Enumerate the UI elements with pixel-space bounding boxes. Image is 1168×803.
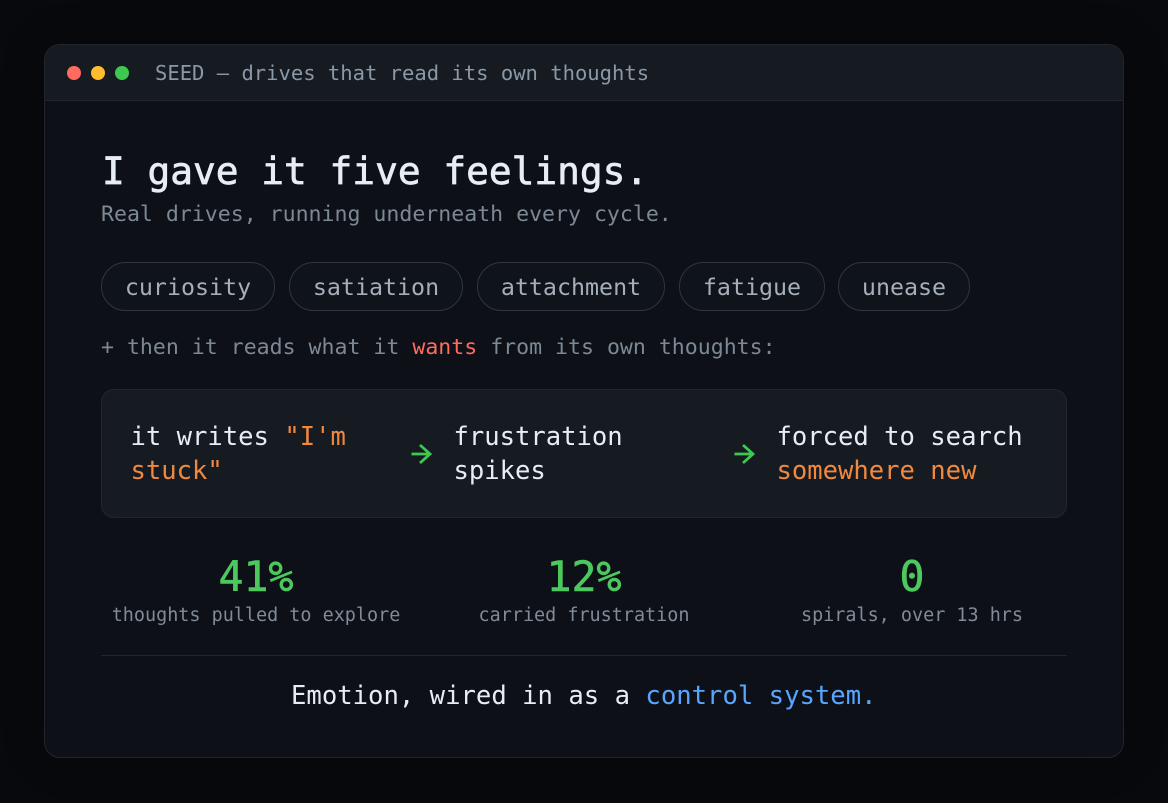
arrow 1 <box>412 444 432 464</box>
flow step 2: spikes <box>454 456 546 486</box>
chip: satiation <box>289 262 463 311</box>
chip: attachment <box>477 262 665 311</box>
chip: satiation: satiation <box>313 274 439 301</box>
chip: fatigue <box>679 262 825 311</box>
arrow 2 <box>734 444 755 464</box>
heading: I gave it five feelings. <box>102 149 648 193</box>
flow step 1 <box>130 422 346 486</box>
chip: unease <box>838 262 970 311</box>
chip: curiosity <box>101 262 275 311</box>
stat: 12% <box>479 552 689 626</box>
icon: green dot <box>115 66 129 80</box>
value: 41% <box>219 552 293 601</box>
title bar <box>45 45 1123 101</box>
chip: attachment: attachment <box>501 274 641 301</box>
closing line: Emotion, wired in as a control system. <box>291 681 877 711</box>
chip: fatigue: fatigue <box>703 274 801 301</box>
panel: feedback flow <box>101 389 1067 518</box>
value: 12% <box>547 552 621 601</box>
flow step 3: somewhere new <box>776 456 976 486</box>
chip: curiosity: curiosity <box>125 274 251 301</box>
stat: 41% <box>112 552 400 626</box>
flow step 1: stuck" <box>130 456 223 486</box>
icon: red dot <box>67 66 81 80</box>
flow step 3: forced to search <box>776 422 1023 452</box>
subtitle: Real drives, running underneath every cycle. <box>101 202 672 227</box>
flow step 3 <box>776 422 1023 486</box>
stat: 0 <box>801 552 1023 626</box>
icon: yellow dot <box>91 66 105 80</box>
flow step 2 <box>454 422 623 486</box>
chip: unease: unease <box>862 274 946 301</box>
window title: SEED — drives that read its own thoughts <box>155 61 649 85</box>
label: thoughts pulled to explore <box>112 605 400 626</box>
transition line: + then it reads what it wants from its own thoughts: <box>101 335 776 360</box>
label: spirals, over 13 hrs <box>801 605 1023 626</box>
flow step 2: frustration <box>454 422 623 452</box>
panel: feeling chips <box>101 262 970 311</box>
flow step 1: it writes "I'm <box>130 422 346 452</box>
value: 0 <box>900 552 924 601</box>
label: carried frustration <box>479 605 689 626</box>
